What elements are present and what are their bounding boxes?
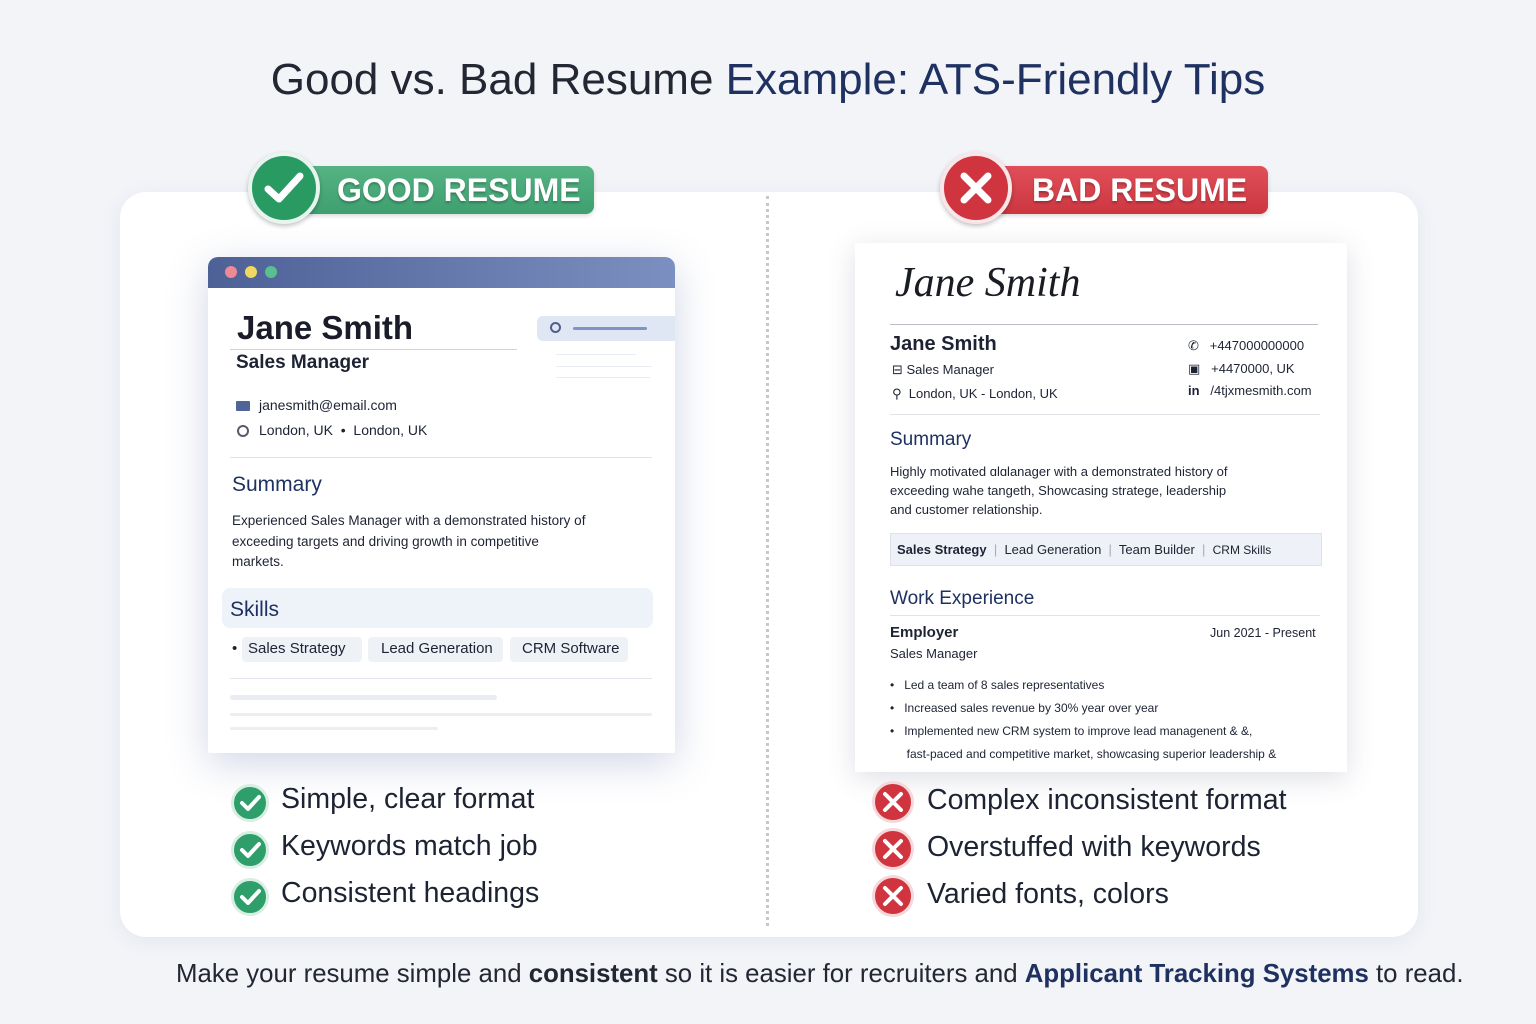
panel: good resume window: janesmith@email.com <box>259 397 397 413</box>
bad points list: Complex inconsistent format <box>927 784 1287 816</box>
good points list: Keywords match job <box>281 830 538 862</box>
panel: bad resume paper: ⚲ London, UK - London, UK <box>892 386 1058 401</box>
badge: bad resume <box>938 152 1270 228</box>
bad points list: Varied fonts, colors <box>927 878 1169 910</box>
panel: good resume window: • <box>232 640 237 657</box>
name: Jane Smith <box>237 309 413 346</box>
bad points list: Overstuffed with keywords <box>927 831 1261 863</box>
panel: bad resume paper: Jun 2021 - Present <box>1210 626 1316 640</box>
title: Good vs. Bad Resume Example: ATS-Friendly Tips <box>271 55 1265 104</box>
skills <box>222 588 653 628</box>
script name: Jane Smith <box>895 260 1080 306</box>
panel: good resume window: Lead Generation <box>381 640 493 657</box>
panel: good resume window: Experienced Sales Manager with a demonstrated history of exceeding targets and driving growth in competitive markets. <box>232 513 585 569</box>
panel: bad resume paper: ✆ +447000000000 <box>1188 338 1304 353</box>
panel: good resume window: London, UK • London, UK <box>259 422 427 438</box>
panel: bad resume paper: ⊟ Sales Manager <box>892 362 994 377</box>
panel: good resume window <box>208 257 675 753</box>
good points list: Simple, clear format <box>281 783 534 815</box>
panel: good resume window: Skills <box>230 598 279 621</box>
good points list: Consistent headings <box>281 877 539 909</box>
panel: bad resume paper: Jane Smith <box>890 333 997 355</box>
skills strip: Sales Strategy | Lead Generation | Team Builder | CRM Skills <box>897 542 1271 557</box>
panel: good resume window: Sales Manager <box>236 352 369 373</box>
badge: good resume: GOOD RESUME <box>337 172 581 208</box>
panel: bad resume paper <box>855 243 1347 772</box>
panel: bad resume paper: • Implemented new CRM system to improve lead managenent & &, <box>890 724 1252 738</box>
panel: bad resume paper: Employer <box>890 624 958 641</box>
window title bar <box>208 257 675 288</box>
skills strip <box>890 533 1322 566</box>
work experience: Work Experience <box>890 588 1034 609</box>
bad summary: Summary <box>890 429 971 450</box>
panel: bad resume paper: Sales Manager <box>890 646 977 661</box>
main card <box>120 192 1418 937</box>
good points list <box>231 783 539 916</box>
panel: bad resume paper: • Increased sales revenue by 30% year over year <box>890 701 1158 715</box>
panel: bad resume paper: fast-paced and competitive market, showcasing superior leadership & <box>907 747 1276 761</box>
panel: bad resume paper: in /4tjxmesmith.com <box>1188 383 1312 398</box>
panel: good resume window: Sales Strategy <box>248 640 346 657</box>
badge: bad resume: BAD RESUME <box>1032 172 1247 208</box>
bad points list <box>872 781 1287 917</box>
divider <box>766 196 769 926</box>
panel: bad resume paper: Highly motivated ɑlɑlanager with a demonstrated history of exceeding wahe tangeth, Showcasing stratege, leadership and customer relationship. <box>890 464 1227 517</box>
footer note: Make your resume simple and consistent so it is easier for recruiters and Applicant Tracking Systems to read. <box>176 960 1464 988</box>
summary: Summary <box>232 473 322 496</box>
panel: bad resume paper: • Led a team of 8 sales representatives <box>890 678 1104 692</box>
contact <box>236 401 250 411</box>
search bar <box>537 316 675 341</box>
badge: good resume <box>246 152 596 228</box>
panel: good resume window: CRM Software <box>522 640 620 657</box>
panel: bad resume paper: ▣ +4470000, UK <box>1188 361 1295 376</box>
